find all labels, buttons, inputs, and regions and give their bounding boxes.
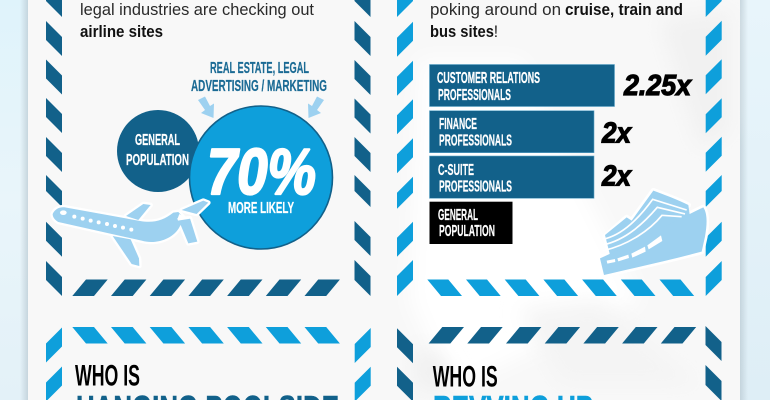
circle: general population: POPULATION <box>126 152 189 169</box>
panel: airline sites <box>46 0 370 296</box>
intro text: legal industries are checking out <box>80 1 314 19</box>
bar: finance: 2x <box>601 118 633 150</box>
circle: 70% more likely: MORE LIKELY <box>228 200 294 217</box>
bar: finance <box>430 111 633 153</box>
bar: finance: PROFESSIONALS <box>439 132 512 150</box>
heading: who is: WHO IS <box>433 361 498 394</box>
airmail border: light stripes <box>46 327 371 400</box>
circle: 70% more likely <box>190 106 332 249</box>
airmail border: light stripes <box>397 0 722 296</box>
bar: customer relations: PROFESSIONALS <box>438 87 511 104</box>
bar: c-suite: C-SUITE <box>438 162 474 179</box>
bar: general population: POPULATION <box>439 223 495 240</box>
intro text bold: airline sites <box>80 23 163 41</box>
airmail border: dark stripes <box>397 326 722 400</box>
bar: customer relations: 2.25x <box>623 70 693 102</box>
label: real estate, legal: REAL ESTATE, LEGAL <box>210 60 309 77</box>
panel: cruise, train and bus sites <box>397 0 722 296</box>
arrow left <box>198 96 214 118</box>
circle: 70% more likely: 70% <box>207 135 316 208</box>
airmail border: dark stripes <box>46 0 370 296</box>
bar: c-suite: PROFESSIONALS <box>439 178 512 196</box>
panel: who is hanging poolside <box>46 327 371 400</box>
bar: customer relations: CUSTOMER RELATIONS <box>437 70 540 87</box>
bar: customer relations <box>430 64 693 106</box>
circle: general population <box>117 110 199 192</box>
panel: who is revving up <box>397 326 722 400</box>
circle: general population: GENERAL <box>135 132 180 149</box>
heading: who is: WHO IS <box>75 360 140 393</box>
icon: airplane <box>53 201 208 266</box>
bar: general population <box>430 202 512 244</box>
intro text second line: bus sites! <box>430 23 498 41</box>
arrow right <box>308 96 324 118</box>
intro text: poking around on <box>430 1 561 19</box>
icon: cruise ship <box>600 191 707 275</box>
bar: finance: FINANCE <box>439 116 477 133</box>
label: advertising / marketing: ADVERTISING / MARKETING <box>191 78 327 95</box>
bar: c-suite: 2x <box>601 160 633 192</box>
intro text bold: cruise, train and <box>565 1 683 19</box>
bar: general population: GENERAL <box>438 207 478 224</box>
bar: c-suite <box>430 156 633 198</box>
